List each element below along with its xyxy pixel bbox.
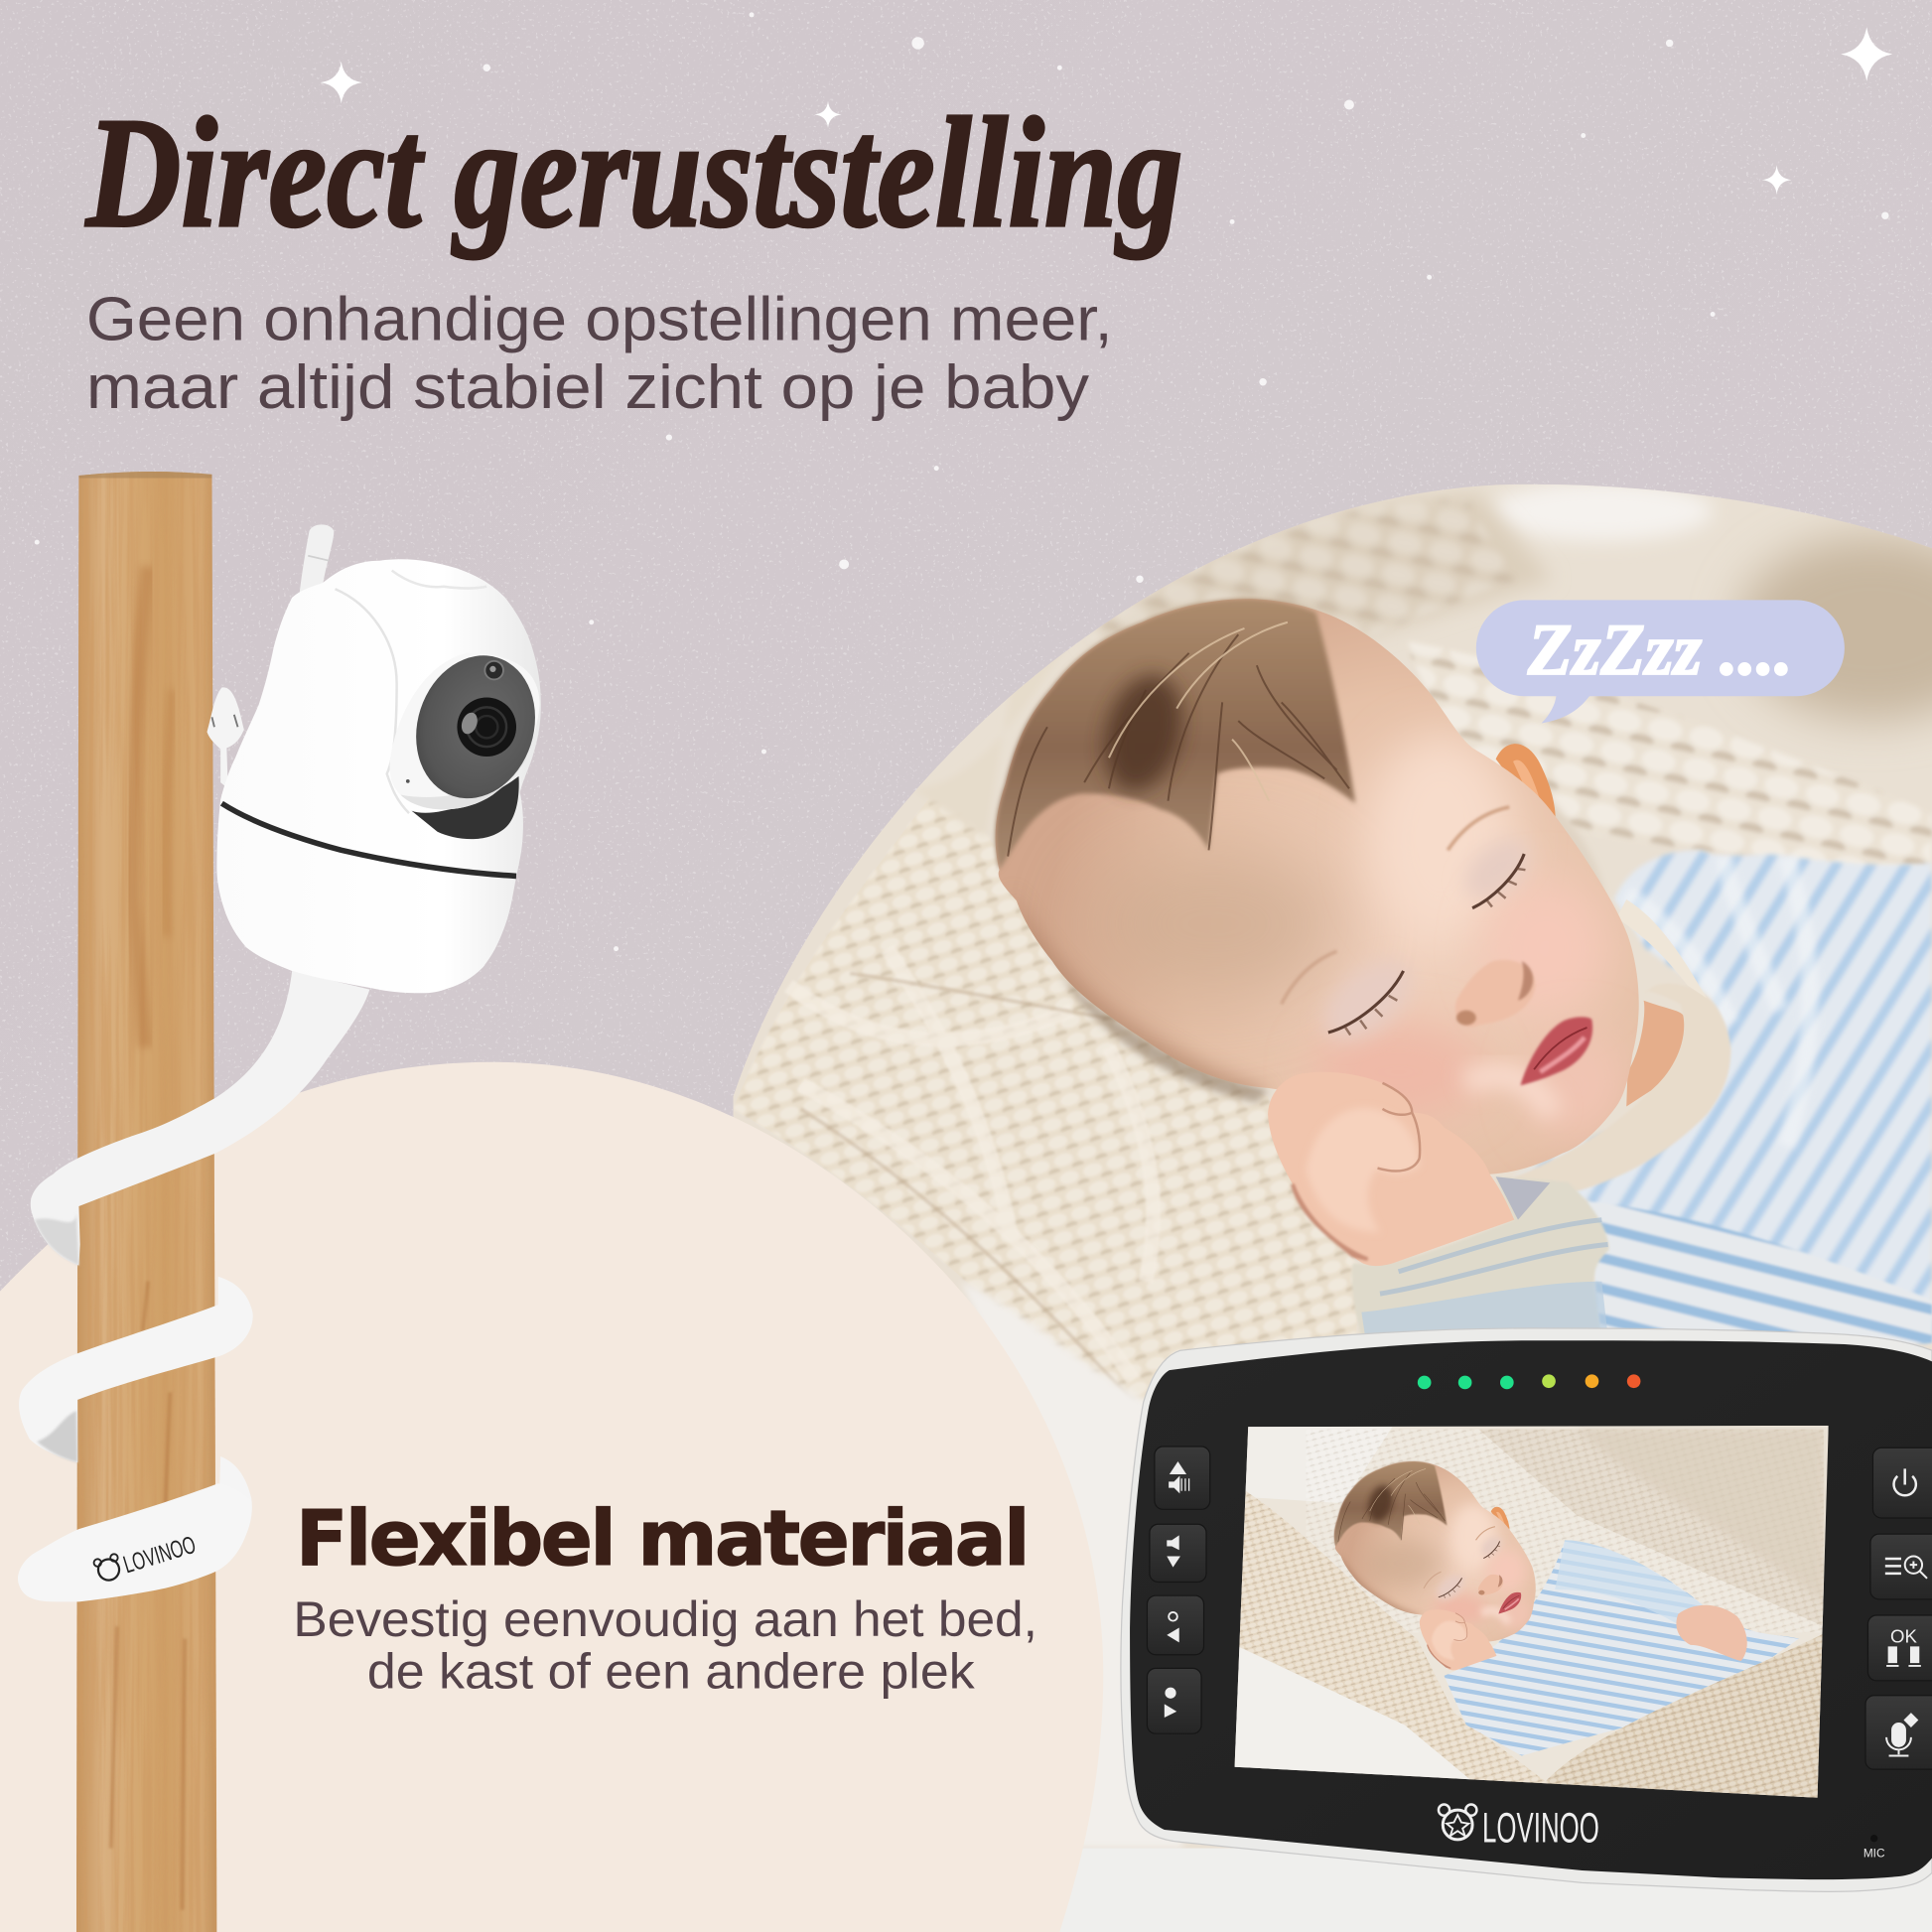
lens housing bbox=[398, 640, 553, 814]
back stubs bbox=[218, 1277, 253, 1356]
black band bbox=[221, 803, 516, 876]
monitor face bbox=[1130, 1340, 1932, 1879]
side nub bbox=[207, 687, 244, 788]
monitor brand logo: LOVINOO bbox=[1482, 1804, 1599, 1851]
brand on strap: LOVINOO bbox=[120, 1532, 199, 1579]
right buttons bbox=[1865, 1448, 1932, 1769]
title: Direct geruststelling bbox=[84, 85, 1182, 260]
monitor brand logo bbox=[1439, 1804, 1599, 1851]
camera bbox=[207, 524, 553, 993]
subtitle: maar altijd stabiel zicht op je baby bbox=[86, 353, 1089, 422]
brand on strap bbox=[93, 1530, 199, 1587]
subtitle bbox=[86, 286, 1113, 422]
white bedding beneath blanket bbox=[961, 1282, 1182, 1849]
wooden pole bbox=[73, 469, 221, 1932]
decorative stars bbox=[321, 27, 1892, 195]
head seam bbox=[336, 589, 409, 813]
collar bbox=[1514, 983, 1730, 1201]
rope knit blanket behind head bbox=[1405, 640, 1932, 888]
baby head and hand bbox=[996, 599, 1639, 1266]
baby monitor bbox=[1121, 1328, 1932, 1891]
right buttons: OK bbox=[1890, 1625, 1917, 1646]
panel heading: Flexibel materiaal bbox=[296, 1495, 1031, 1584]
speech bubble bbox=[1476, 600, 1845, 724]
microphone label bbox=[1863, 1835, 1885, 1860]
speech bubble: ZzZzz .... bbox=[1527, 610, 1793, 691]
floor behind monitor bbox=[1059, 1849, 1932, 1932]
white lens rim bbox=[390, 653, 540, 809]
body bbox=[216, 559, 541, 993]
flexible arm wrapped around pole bbox=[18, 971, 369, 1601]
monitor frame bbox=[1121, 1328, 1932, 1891]
panel text: Bevestig eenvoudig aan het bed, bbox=[293, 1591, 1037, 1647]
left buttons bbox=[1147, 1447, 1210, 1733]
panel text bbox=[293, 1591, 1037, 1699]
monitor screen bbox=[1232, 1423, 1836, 1805]
level LEDs bbox=[1418, 1374, 1640, 1389]
panel text: de kast of een andere plek bbox=[367, 1643, 975, 1699]
photo: sleeping baby bbox=[727, 481, 1932, 1932]
blue striped outfit bbox=[1514, 850, 1932, 1343]
dark chin bbox=[412, 776, 519, 839]
beige panel bbox=[0, 1062, 1103, 1932]
sleeve cuff bbox=[1352, 1176, 1609, 1337]
subtitle: Geen onhandige opstellingen meer, bbox=[86, 286, 1113, 354]
pillow knit bbox=[733, 788, 1361, 1417]
antenna bbox=[300, 524, 334, 594]
microphone label: MIC bbox=[1863, 1847, 1885, 1860]
